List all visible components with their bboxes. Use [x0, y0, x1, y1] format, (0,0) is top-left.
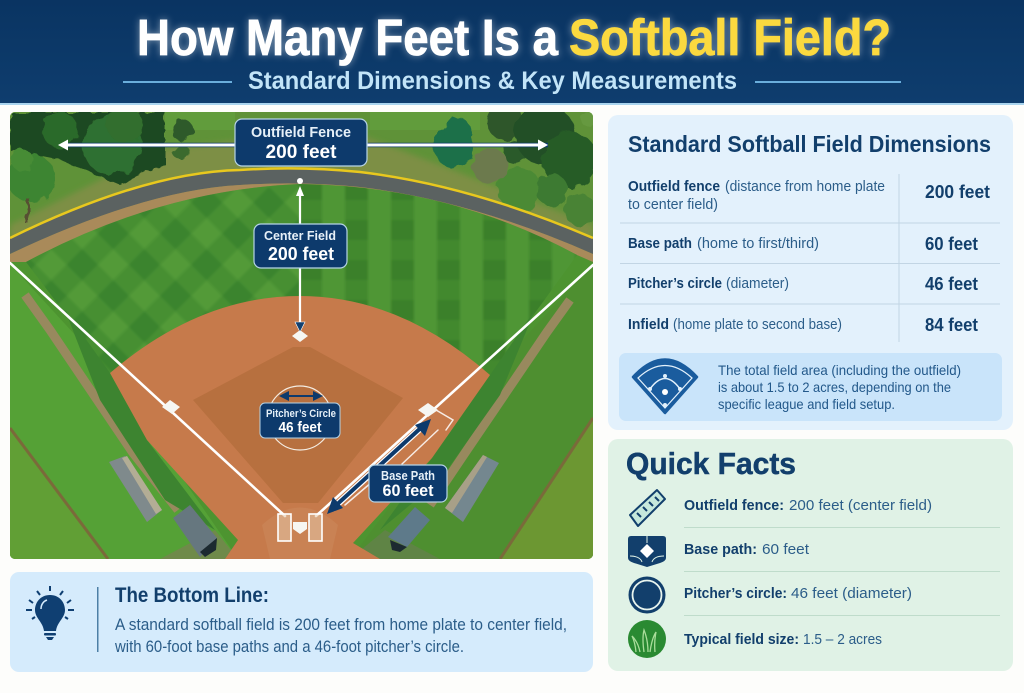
foul territory grass and paths: [10, 264, 593, 559]
label: pitcher's circle: 46 feet: [278, 419, 322, 436]
row: infield: 84 feet: [925, 315, 978, 335]
row: pitcher's circle: Pitcher’s circle: [628, 275, 722, 292]
callout text: The total field area (including the outfield): [718, 362, 961, 378]
icon: circle: [628, 576, 666, 614]
panel: quick facts: [608, 439, 1013, 671]
infield dirt: [110, 296, 490, 559]
icon: grass: [628, 620, 666, 658]
row: base path: 60 feet: [925, 234, 978, 254]
header banner: [0, 0, 1024, 105]
foul lines: [10, 263, 593, 516]
batter's boxes: [278, 514, 322, 541]
row: outfield fence: 200 feet: [925, 182, 990, 202]
label: center field: [254, 224, 347, 268]
fact: base path: Base path:: [684, 541, 757, 558]
fact: base path: 60 feet: [762, 541, 810, 558]
fact: pitcher's circle: Pitcher’s circle:: [684, 585, 787, 602]
bases and home plate: [162, 330, 438, 534]
pitcher's circle arc: [268, 386, 332, 450]
icon: base path: [628, 536, 666, 567]
fact: outfield fence: [630, 490, 932, 526]
label: center field: 200 feet: [268, 244, 334, 264]
label: base path: Base Path: [381, 468, 435, 483]
bleachers and dugouts: [109, 455, 499, 557]
fact: typical field size: Typical field size:: [684, 631, 799, 648]
label: center field: Center Field: [264, 228, 336, 243]
row: outfield fence: to center field): [628, 196, 718, 213]
bottom line heading: The Bottom Line:: [115, 584, 269, 607]
row: base path: (home to first/third): [697, 235, 819, 252]
row: outfield fence: Outfield fence: [628, 178, 720, 195]
quick facts heading: Quick Facts: [626, 446, 796, 481]
row: outfield fence: (distance from home plate: [725, 178, 885, 195]
label: outfield fence: Outfield Fence: [251, 125, 351, 141]
callout text: [718, 362, 961, 412]
fact: outfield fence: Outfield fence:: [684, 497, 784, 514]
fact: pitcher's circle: [628, 576, 912, 614]
icon: light bulb: [26, 586, 74, 640]
fact: typical field size: 1.5 – 2 acres: [803, 631, 882, 648]
fact: outfield fence: 200 feet (center field): [789, 497, 932, 514]
arrow: base path: [327, 419, 431, 514]
outfield fence with yellow cap: [10, 168, 593, 254]
panel: aerial softball field photo illustration: [7, 104, 598, 559]
row: infield: Infield: [628, 316, 669, 333]
background grass and trees: [7, 104, 598, 250]
arrow: center field: [295, 178, 305, 332]
bottom line text: with 60-foot base paths and a 46-foot pitcher’s circle.: [114, 638, 464, 656]
row: infield: (home plate to second base): [673, 316, 842, 333]
label: outfield fence: [235, 119, 367, 166]
label: pitcher's circle: [260, 403, 340, 438]
title: [137, 9, 891, 66]
label: base path: [369, 465, 447, 502]
table heading: Standard Softball Field Dimensions: [628, 131, 991, 157]
subtitle with rules: Standard Dimensions & Key Measurements: [248, 67, 737, 95]
label: outfield fence: 200 feet: [266, 142, 337, 163]
callout text: specific league and field setup.: [718, 396, 895, 412]
row: base path: Base path: [628, 235, 692, 252]
row: outfield fence: [628, 178, 990, 213]
row: pitcher's circle: (diameter): [726, 275, 789, 292]
callout: total field area: [619, 353, 1002, 421]
row: base path: [628, 234, 978, 254]
title: Softball Field?: [569, 9, 891, 66]
mowed outfield grass: [26, 184, 577, 374]
label: base path: 60 feet: [382, 481, 434, 500]
icon: field diagram: [633, 360, 697, 413]
row: pitcher's circle: 46 feet: [925, 274, 978, 294]
arrow: pitcher's circle diameter: [283, 395, 319, 397]
callout text: is about 1.5 to 2 acres, depending on the: [718, 379, 951, 395]
panel: the bottom line: [10, 572, 593, 672]
arrow: outfield span: [58, 140, 548, 150]
row: pitcher's circle: [628, 274, 978, 294]
label: pitcher's circle: Pitcher’s Circle: [266, 408, 336, 420]
fact: pitcher's circle: 46 feet (diameter): [791, 585, 912, 602]
bottom line text: A standard softball field is 200 feet from home plate to center field,: [115, 616, 567, 634]
title: How Many Feet Is a: [137, 9, 559, 66]
fact: typical field size: [628, 620, 882, 658]
warning track: [10, 183, 593, 262]
fact: base path: [628, 536, 810, 567]
bottom line text: [114, 616, 567, 656]
row: infield: [628, 315, 978, 335]
icon: ruler: [630, 490, 665, 526]
panel: standard softball field dimensions: [608, 115, 1013, 430]
